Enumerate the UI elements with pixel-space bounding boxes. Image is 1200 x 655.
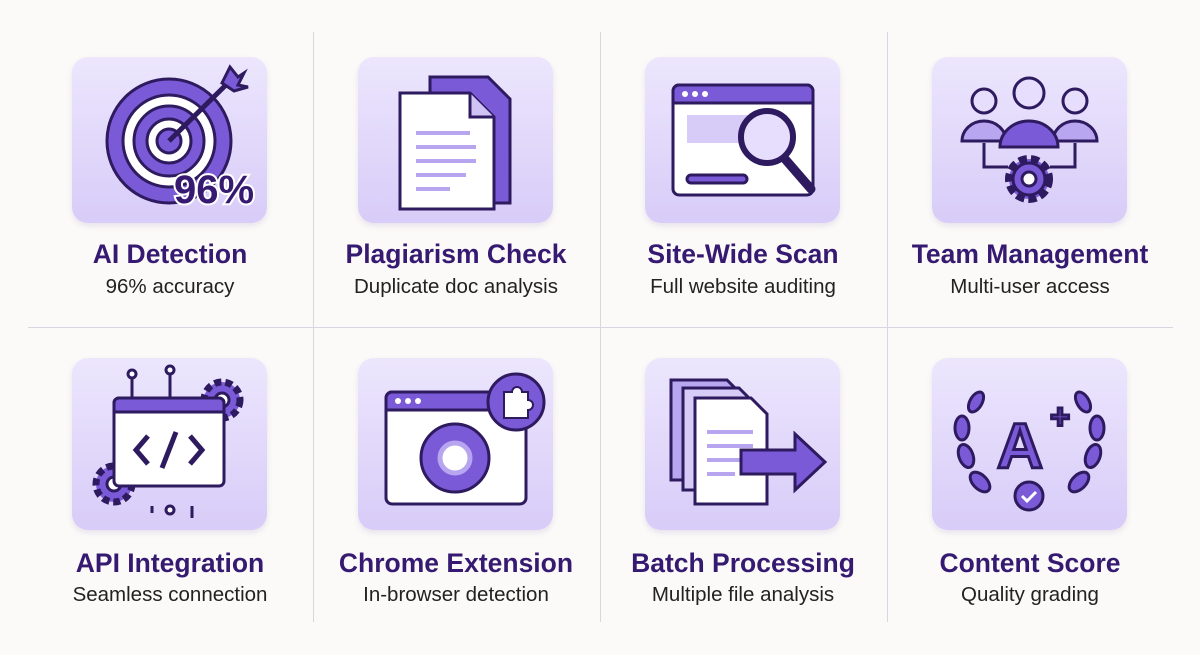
- panel: Chrome Extension: [339, 358, 573, 606]
- title: Content Score: [939, 548, 1121, 578]
- icon: A+ grade with laurel: A: [997, 410, 1043, 482]
- title: Site-Wide Scan: [647, 239, 839, 269]
- icon: target with 96%: [72, 57, 267, 223]
- icon: A+ grade with laurel: [932, 358, 1127, 530]
- icon: browser with magnifier: [645, 57, 840, 223]
- panel: Team Management: [912, 57, 1148, 298]
- panel: Plagiarism Check: [346, 57, 566, 298]
- icon: stacked documents with arrow: [645, 358, 840, 530]
- title: Plagiarism Check: [346, 239, 566, 269]
- icon: code window with gears: [72, 358, 267, 530]
- icon: browser with chrome logo and puzzle: [358, 358, 553, 530]
- subtitle: 96% accuracy: [106, 275, 234, 298]
- subtitle: Multiple file analysis: [652, 583, 834, 606]
- icon: A+ grade with laurel: +: [1050, 398, 1070, 436]
- panel: Batch Processing: [631, 358, 855, 606]
- panel: Site-Wide Scan: [644, 57, 841, 298]
- title: Team Management: [912, 239, 1148, 269]
- title: API Integration: [76, 548, 264, 578]
- subtitle: In-browser detection: [363, 583, 549, 606]
- title: AI Detection: [93, 239, 247, 269]
- title: Chrome Extension: [339, 548, 573, 578]
- panel: AI Detection: [71, 57, 268, 298]
- subtitle: Multi-user access: [950, 275, 1110, 298]
- panel: API Integration: [71, 358, 268, 606]
- subtitle: Seamless connection: [73, 583, 267, 606]
- icon: duplicate documents: [358, 57, 553, 223]
- subtitle: Duplicate doc analysis: [354, 275, 558, 298]
- subtitle: Quality grading: [961, 583, 1099, 606]
- icon: people with gear: [932, 57, 1127, 223]
- subtitle: Full website auditing: [650, 275, 836, 298]
- title: Batch Processing: [631, 548, 855, 578]
- icon: target with 96%: 96%: [174, 168, 254, 212]
- panel: Content Score: [931, 358, 1128, 606]
